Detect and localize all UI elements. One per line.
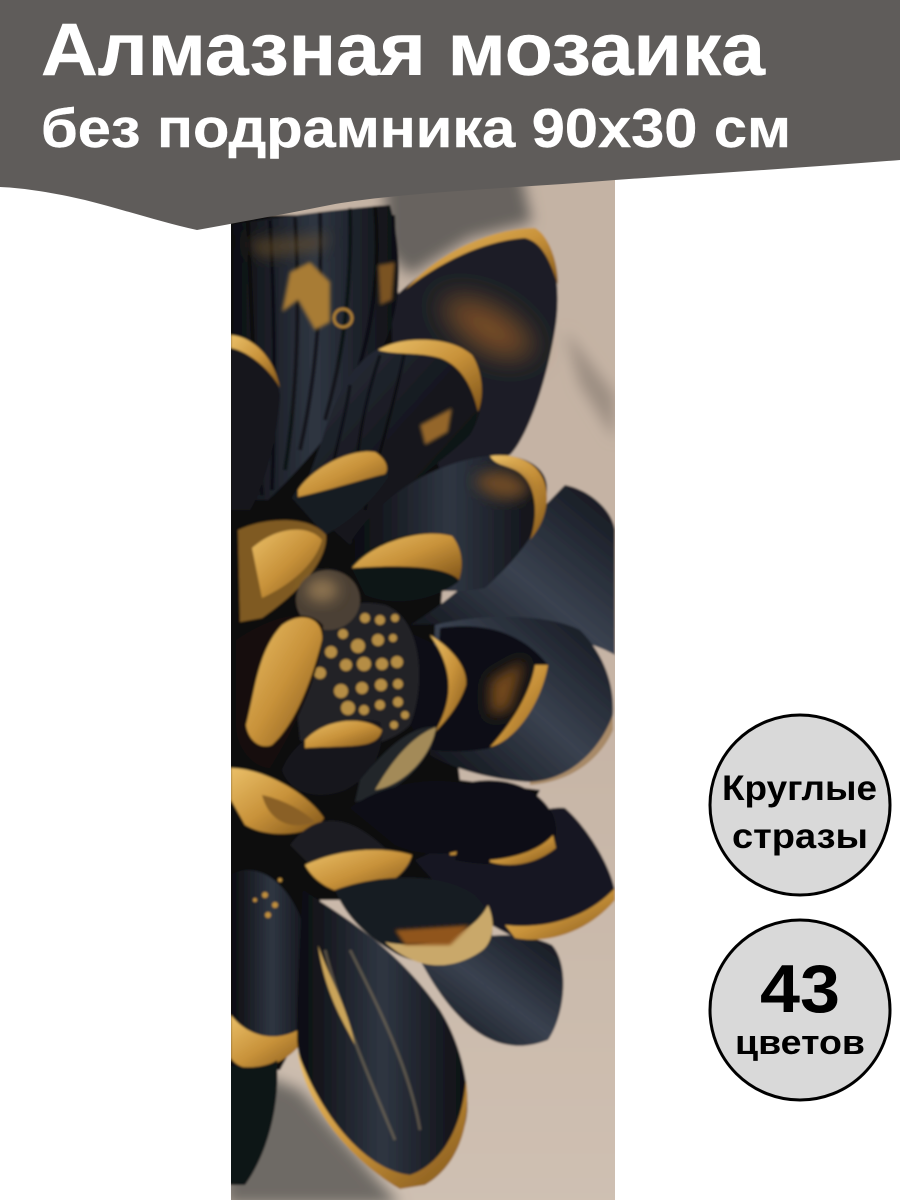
badge: round rhinestones [710,715,890,895]
grey stone texture bottom [231,1072,403,1200]
golden tip centre [290,820,412,878]
gold streak lower centre petal [355,727,436,802]
gold seeds [314,613,409,729]
middle upper petal [300,344,482,545]
left gold curled petal [238,520,326,622]
left gold tip lower [231,768,324,834]
left lower petal [232,869,302,1066]
pod top dome [296,570,360,630]
gold tipped small petal centre [350,533,462,601]
badge: 43 colours: цветов [735,1024,865,1062]
grey stone texture top [385,170,532,275]
dark petal with gold rim [455,780,556,864]
seed pod [295,570,419,748]
left small petal with gold tip [231,335,280,510]
gold cap lower centre [282,720,382,795]
dark flower underlay [225,215,540,1070]
large top left petal [231,205,399,500]
gold bowl petal [335,878,492,963]
small inner right petal [410,634,440,730]
title: Алмазная мозаика [41,8,766,91]
badge: 43 colours: 43 [760,951,840,1027]
bottom large petal [297,890,468,1188]
inner gold rim petal [432,626,548,751]
middle right petal [352,455,547,591]
lower far petal [420,935,563,1046]
large gold petal left [236,616,323,768]
lower right petal with gold rim [415,808,615,938]
gold tipped petal [292,472,376,535]
grey stone texture right [566,338,615,434]
gold patch on top petal [282,262,330,330]
bottom left dark petal [225,1060,278,1185]
upper right petal [392,228,558,470]
far blue petal right [410,485,615,655]
lower right big petal [430,617,613,782]
canvas background [225,165,621,1200]
header banner [0,0,900,230]
badge: 43 colours [710,920,890,1100]
subtitle: без подрамника 90х30 см [41,97,791,159]
badge: round rhinestones: стразы [732,817,868,856]
petals lower middle [351,781,470,854]
badge: round rhinestones: Круглые [722,769,877,808]
artwork: black and gold lotus panel [225,165,621,1200]
